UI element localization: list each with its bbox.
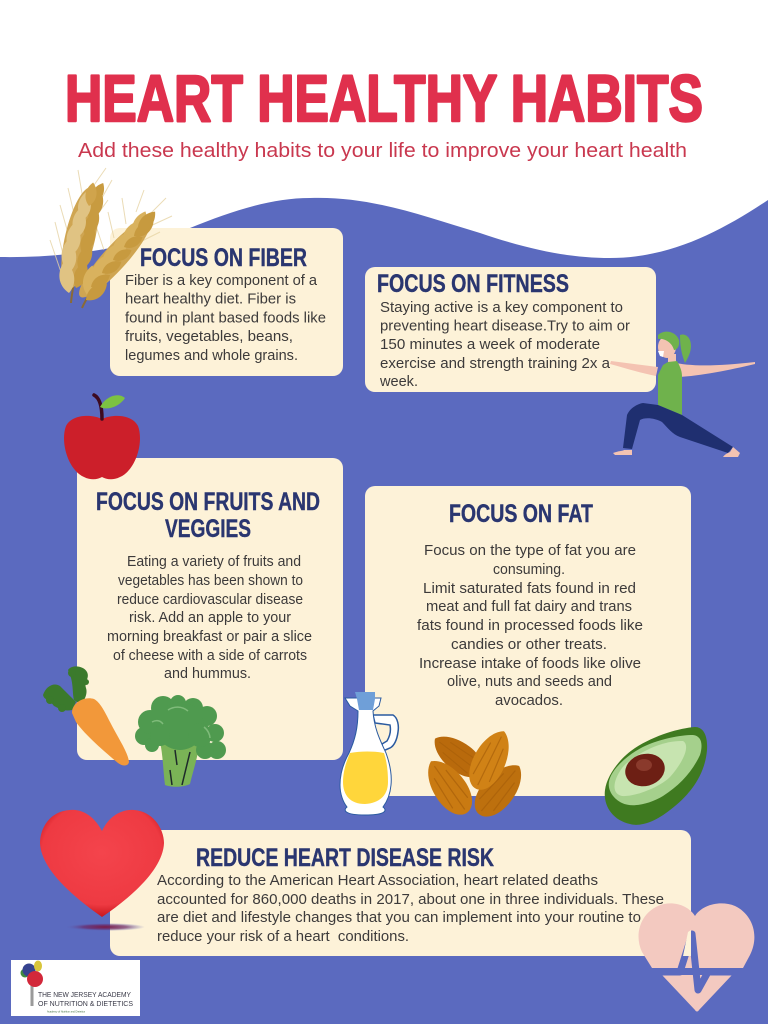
body text: fitness: 150 minutes a week of moderate (380, 336, 600, 353)
heading: focus on fiber: FOCUS ON FIBER (140, 244, 307, 272)
body text: fat: Increase intake of foods like olive (419, 655, 641, 672)
body text: fruits and veggies: of cheese with a side of carrots (113, 647, 307, 664)
body text: fiber (125, 272, 326, 364)
body text: fiber: legumes and whole grains. (125, 347, 298, 364)
icon: red heart (40, 810, 164, 917)
icon: almonds (418, 724, 532, 825)
body text: fat: Limit saturated fats found in red (423, 580, 636, 597)
body text: fat: Focus on the type of fat you are (424, 542, 636, 559)
body text: risk: According to the American Heart Association, heart related deaths (157, 872, 598, 889)
body text: fitness (379, 299, 630, 390)
logo name: Academy of Nutrition and Dietetics (47, 1010, 85, 1014)
heading: focus on fruits and veggies: FOCUS ON FRUITS AND (96, 488, 320, 516)
icon: olive oil bottle (340, 692, 398, 815)
panel: focus on fiber (110, 228, 343, 376)
panel: focus on fat (365, 486, 691, 796)
body text: fiber: fruits, vegetables, beans, (125, 328, 293, 345)
icon: heartbeat heart (639, 903, 754, 1012)
heading: focus on fitness: FOCUS ON FITNESS (377, 270, 569, 298)
body text: fitness: preventing heart disease.Try to aim or (380, 318, 630, 334)
heading: focus on fruits and veggies: VEGGIES (165, 515, 251, 543)
body text: fruits and veggies: Eating a variety of fruits and (127, 553, 301, 570)
body text: fat: avocados. (495, 692, 563, 709)
logo name: OF NUTRITION & DIETETICS (38, 999, 133, 1008)
body text: risk: accounted for 860,000 deaths in 2017, about one in three individuals. These (157, 891, 664, 908)
body text: fitness: week. (379, 373, 418, 390)
body text: fiber: Fiber is a key component of a (125, 272, 318, 289)
panel: focus on fruits and veggies (77, 458, 343, 760)
icon: apple (64, 395, 140, 479)
icon: carrot (43, 666, 129, 766)
icon: woman doing lunge (610, 332, 755, 457)
logo: new jersey academy of nutrition and dietetics (11, 960, 140, 1016)
logo name (38, 990, 133, 1014)
body text: fat: fats found in processed foods like (417, 617, 643, 634)
icon: wheat (50, 168, 172, 308)
heading: focus on fat: FOCUS ON FAT (449, 500, 593, 528)
body text: fiber: heart healthy diet. Fiber is (125, 291, 296, 308)
icon: heart shadow (65, 923, 145, 931)
logo name: THE NEW JERSEY ACADEMY (38, 990, 131, 999)
body text: fruits and veggies (107, 553, 312, 682)
body text: fat: meat and full fat dairy and trans (426, 598, 632, 615)
body text: fat: candies or other treats. (451, 636, 607, 653)
subtitle: Add these healthy habits to your life to improve your heart health (78, 140, 687, 162)
body text: fitness: exercise and strength training 2x a (380, 355, 611, 372)
body text: fat: olive, nuts and seeds and (447, 673, 612, 690)
body text: fruits and veggies: and hummus. (164, 665, 251, 682)
panel: reduce heart disease risk (110, 830, 691, 956)
body text: fruits and veggies: reduce cardiovascular disease (117, 591, 303, 608)
body text: fitness: Staying active is a key component to (380, 299, 623, 316)
body text: fat (417, 542, 643, 709)
body text: fruits and veggies: risk. Add an apple to your (129, 609, 291, 626)
icon: broccoli (135, 695, 226, 787)
body text: fiber: found in plant based foods like (125, 309, 326, 326)
logo fruit (20, 960, 43, 987)
body text: fruits and veggies: morning breakfast or pair a slice (107, 628, 312, 645)
panel: focus on fitness (365, 267, 656, 392)
body text: fat: consuming. (493, 561, 565, 578)
body text: risk: are diet and lifestyle changes that you can implement into your routine to (157, 909, 641, 926)
body text: fruits and veggies: vegetables has been shown to (118, 572, 303, 589)
logo fork (30, 984, 34, 1006)
body text: risk: reduce your risk of a heart conditions. (157, 928, 409, 945)
heading: focus on fruits and veggies (96, 488, 320, 543)
heading: reduce heart disease risk: REDUCE HEART DISEASE RISK (196, 844, 494, 872)
body text: risk (157, 872, 664, 945)
icon: avocado (605, 727, 707, 825)
